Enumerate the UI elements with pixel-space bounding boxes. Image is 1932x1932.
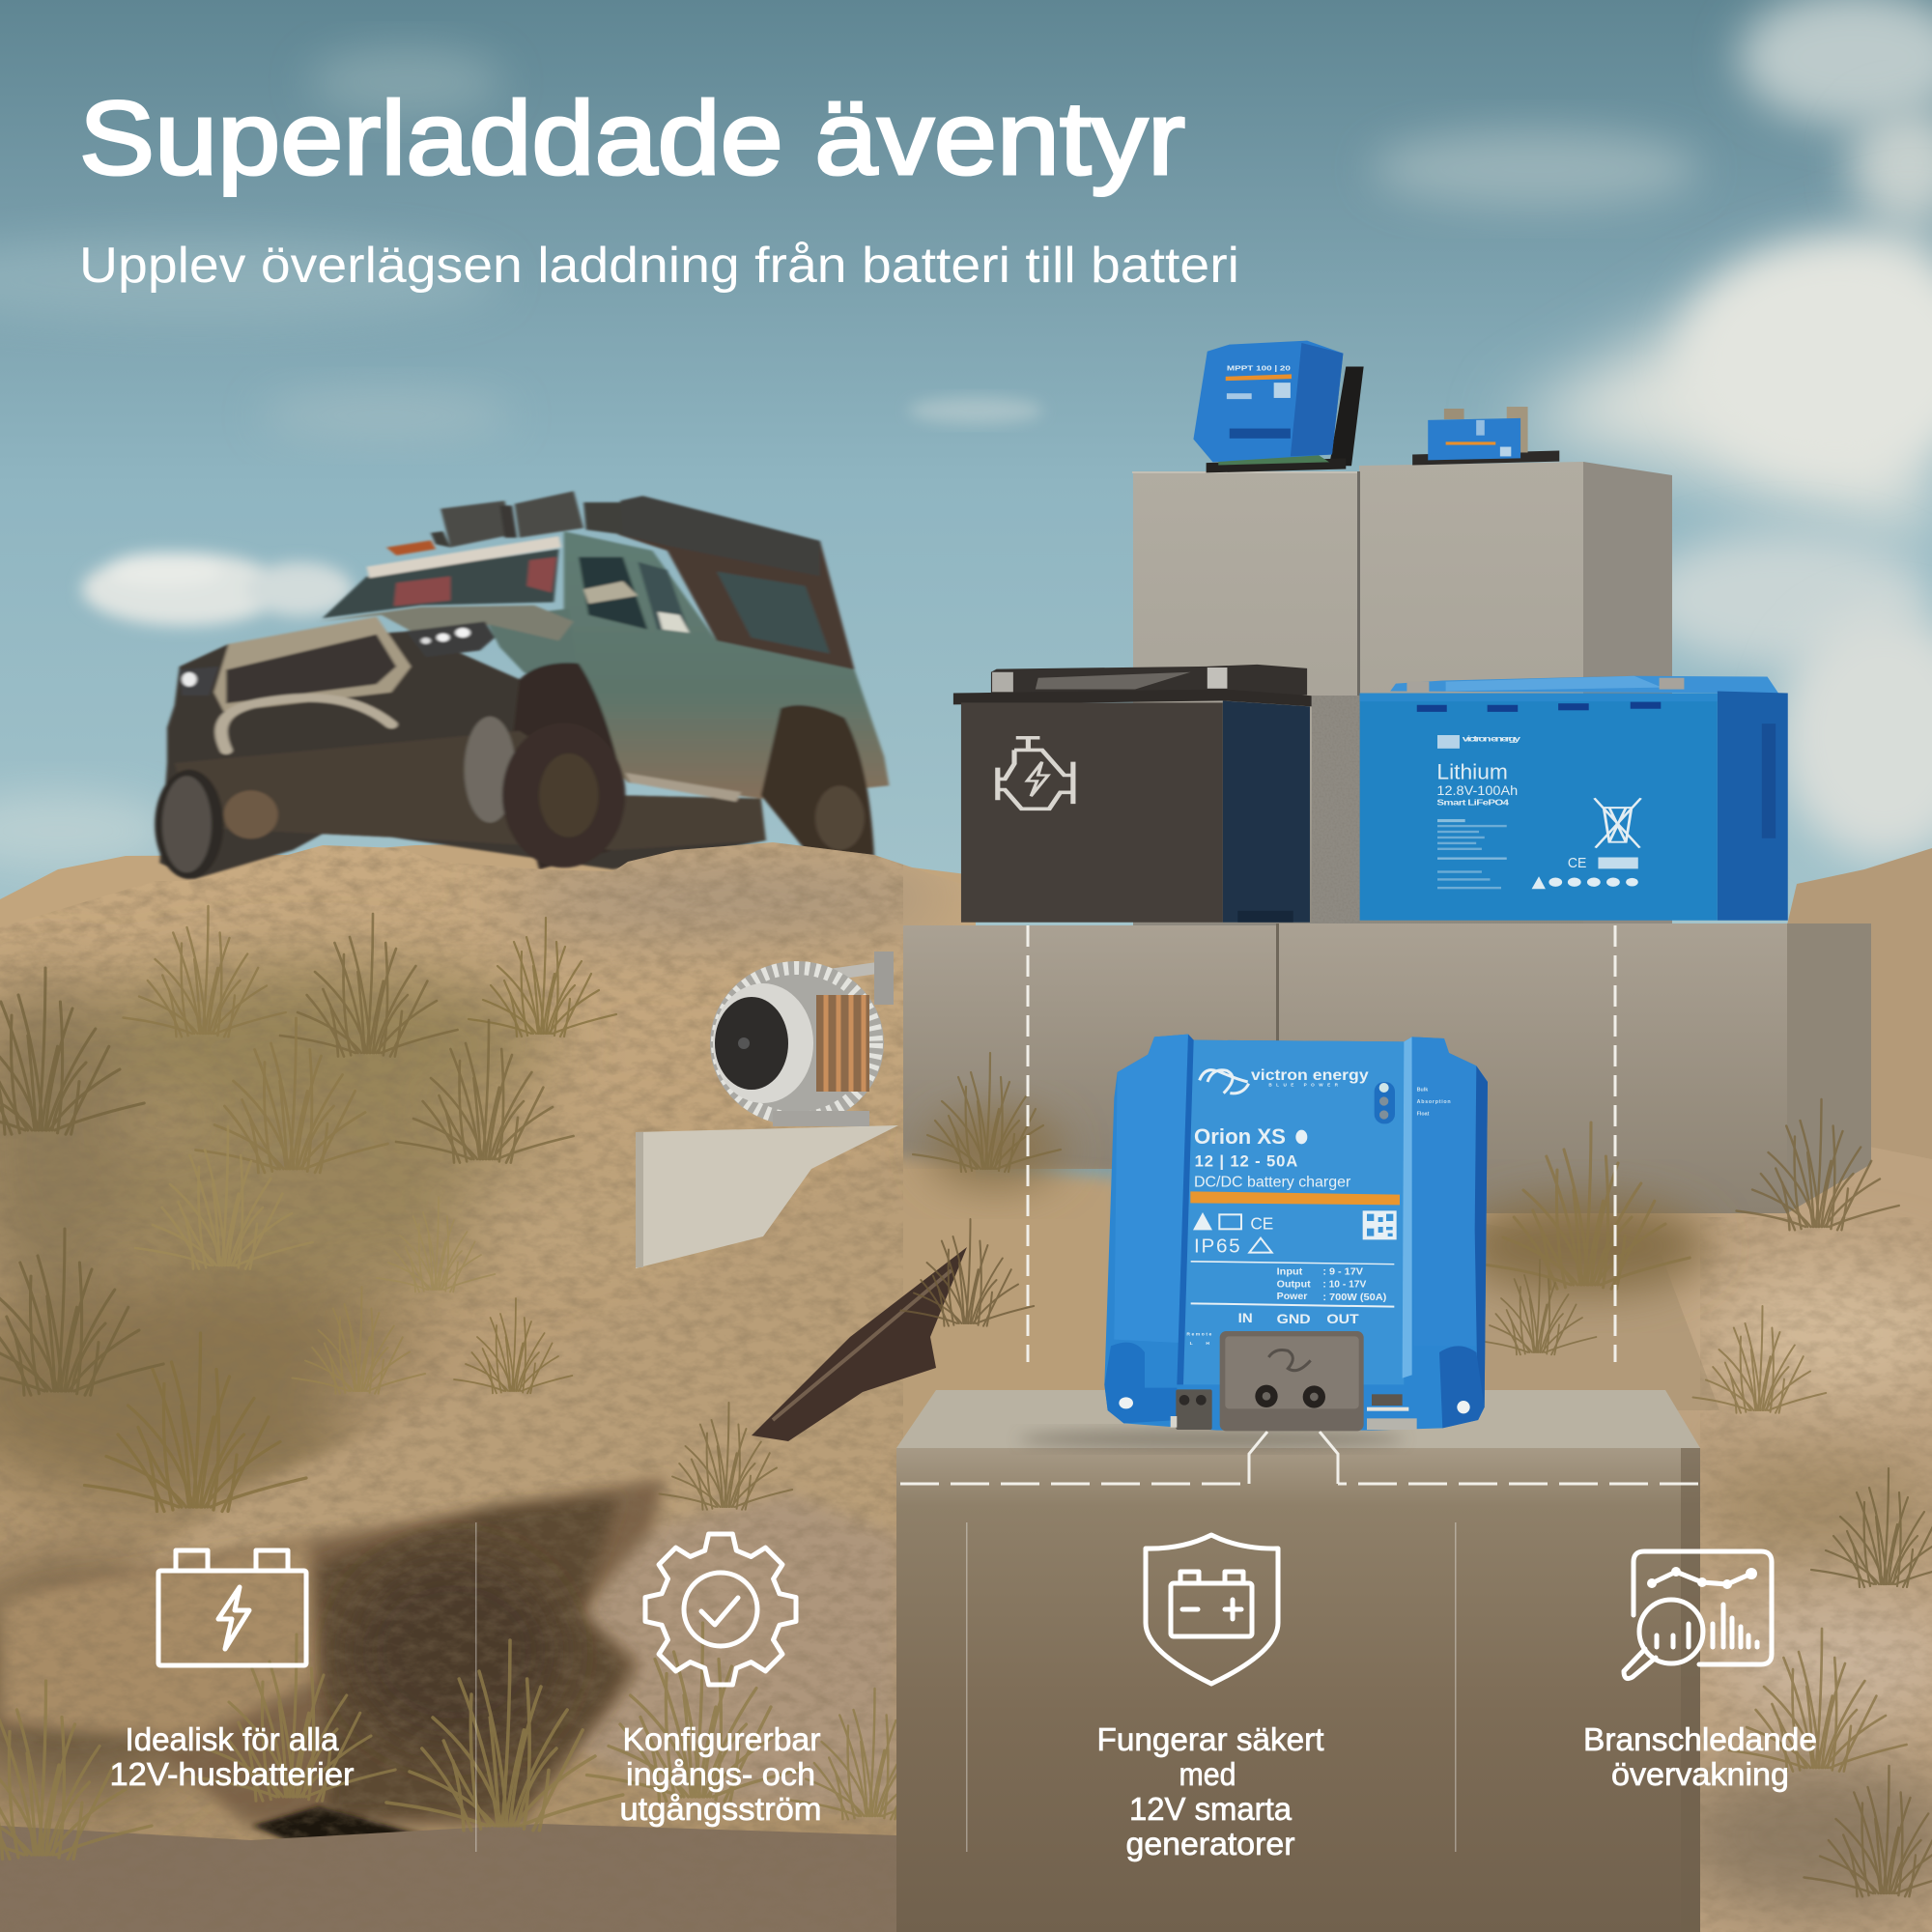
Orion XS charger device	[1104, 1035, 1488, 1431]
benefit label: monitoring: Branschledande	[1583, 1721, 1817, 1757]
device specs	[1186, 1261, 1394, 1347]
device mounting holes	[1119, 1397, 1470, 1413]
cloud left	[82, 553, 353, 626]
device specs: Output	[1277, 1279, 1311, 1290]
MPPT solar charger: MPPT 100 | 20	[1227, 364, 1291, 372]
device certification row: IP65	[1194, 1236, 1240, 1258]
device specs: : 9 - 17V	[1322, 1266, 1363, 1277]
sky background	[0, 0, 1932, 966]
sand ground base	[0, 831, 976, 1932]
truck cab body	[564, 531, 889, 799]
benefit label: monitoring	[1583, 1721, 1817, 1792]
dashed connector lines upper	[1028, 925, 1615, 1362]
benefit label: configurable current	[620, 1721, 821, 1827]
bull bar	[221, 697, 391, 751]
device specs: Power	[1277, 1292, 1307, 1302]
benefit label: configurable current: ingångs- och	[626, 1756, 815, 1792]
windshield	[323, 549, 559, 618]
device LED pill: Bulk	[1417, 1087, 1428, 1093]
battery shunt	[1412, 407, 1559, 466]
device LED pill: Float	[1417, 1112, 1430, 1118]
middle concrete blocks	[903, 923, 1871, 1213]
front fender	[485, 609, 579, 679]
MPPT solar charger	[1193, 341, 1364, 472]
device model text: 12 | 12 - 50A	[1195, 1152, 1297, 1171]
benefit label: smart generators: 12V smarta	[1129, 1791, 1293, 1827]
device specs: : 10 - 17V	[1322, 1279, 1367, 1290]
benefit label: monitoring: övervakning	[1611, 1756, 1789, 1792]
device body	[1104, 1035, 1488, 1431]
big foreground rock	[0, 1478, 666, 1845]
device LED pill	[1375, 1082, 1451, 1123]
distant dune right	[1777, 848, 1932, 1159]
batteries and small devices group	[953, 341, 1788, 923]
ground shading	[0, 865, 966, 1797]
device orange stripe	[1190, 1191, 1400, 1205]
light bar	[367, 536, 561, 578]
truck canopy	[618, 496, 855, 669]
device specs: OUT	[1326, 1311, 1359, 1326]
device side connectors	[1171, 1389, 1417, 1430]
right ground	[1256, 1140, 1932, 1932]
lithium battery label: Lithium	[1436, 759, 1508, 783]
dry grass tufts	[0, 906, 1932, 1896]
benefit label: configurable current: utgångsström	[620, 1791, 821, 1827]
benefit label: 12V batteries: 12V-husbatterier	[110, 1756, 355, 1792]
icon: gear with check	[645, 1534, 796, 1685]
device certification row	[1193, 1212, 1273, 1258]
truck dark underbody	[159, 631, 766, 879]
lithium battery label	[1436, 734, 1638, 889]
foreground sand ridges	[116, 1111, 1719, 1642]
benefit label: smart generators	[1097, 1721, 1323, 1861]
engine icon bolt	[1027, 762, 1048, 796]
icon: battery with bolt	[158, 1550, 306, 1665]
benefit label: 12V batteries: Idealisk för alla	[126, 1721, 339, 1757]
device certification row: CE	[1250, 1213, 1273, 1233]
starter battery	[953, 665, 1312, 923]
right ground texture	[1700, 1217, 1932, 1932]
device specs: L	[1190, 1341, 1193, 1347]
title: Superladdade äventyr	[79, 79, 1185, 196]
top concrete blocks	[1132, 462, 1672, 925]
device logo: BLUE POWER	[1268, 1082, 1339, 1087]
wheels	[155, 705, 874, 879]
rocker panel	[625, 773, 741, 802]
headlights	[180, 621, 495, 696]
device specs: Remote	[1186, 1332, 1212, 1338]
benefit label: smart generators: generatorer	[1126, 1826, 1295, 1861]
icon: chart with magnifier	[1624, 1551, 1772, 1679]
device specs: Input	[1277, 1266, 1303, 1277]
icon: shield with battery	[1146, 1535, 1278, 1684]
lithium battery label: Smart LiFePO4	[1436, 799, 1510, 808]
benefit label: smart generators: Fungerar säkert	[1097, 1721, 1323, 1757]
divider two	[966, 1522, 968, 1852]
roof boxes	[386, 491, 623, 555]
bottom sand	[0, 1824, 898, 1932]
device QR code	[1363, 1210, 1397, 1239]
device specs: : 700W (50A)	[1322, 1293, 1386, 1303]
back hill	[0, 840, 966, 1063]
recycling prohibited icon	[1594, 798, 1641, 848]
lithium battery label: victron energy	[1463, 734, 1520, 744]
ground texture overlay	[0, 831, 903, 1932]
benefit label: configurable current: Konfigurerbar	[622, 1721, 821, 1757]
device LED pill: Absorption	[1417, 1099, 1451, 1105]
dashed connector lines lower	[900, 1432, 1698, 1484]
device model text	[1194, 1124, 1350, 1190]
device specs: GND	[1277, 1311, 1311, 1326]
hood	[318, 606, 574, 640]
engine icon	[998, 738, 1073, 809]
device model text: DC/DC battery charger	[1194, 1174, 1350, 1190]
side windows	[579, 557, 690, 633]
lithium battery label: 12.8V-100Ah	[1436, 782, 1518, 798]
subtitle: Upplev överlägsen laddning från batteri till batteri	[79, 238, 1239, 294]
divider three	[1455, 1522, 1457, 1852]
wheel arches	[175, 663, 766, 869]
alternator	[710, 952, 894, 1126]
grille	[213, 616, 412, 712]
device model text: Orion XS	[1194, 1124, 1286, 1149]
truck	[155, 491, 889, 879]
device logo	[1200, 1067, 1369, 1094]
benefit label: 12V batteries	[110, 1721, 355, 1792]
lithium battery label: CE	[1568, 855, 1586, 870]
clouds right	[1507, 0, 1932, 860]
lithium battery	[1360, 676, 1788, 921]
benefit label: smart generators: med	[1179, 1756, 1236, 1792]
alternator pedestal	[636, 1125, 898, 1268]
device logo: victron energy	[1251, 1067, 1369, 1084]
device specs: IN	[1238, 1310, 1253, 1325]
front concrete block	[896, 1390, 1700, 1932]
divider one	[475, 1522, 477, 1852]
rock right of ridge	[529, 1492, 898, 1816]
driftwood	[752, 1247, 967, 1441]
device specs: H	[1206, 1341, 1209, 1347]
device terminal cover	[1220, 1331, 1364, 1431]
